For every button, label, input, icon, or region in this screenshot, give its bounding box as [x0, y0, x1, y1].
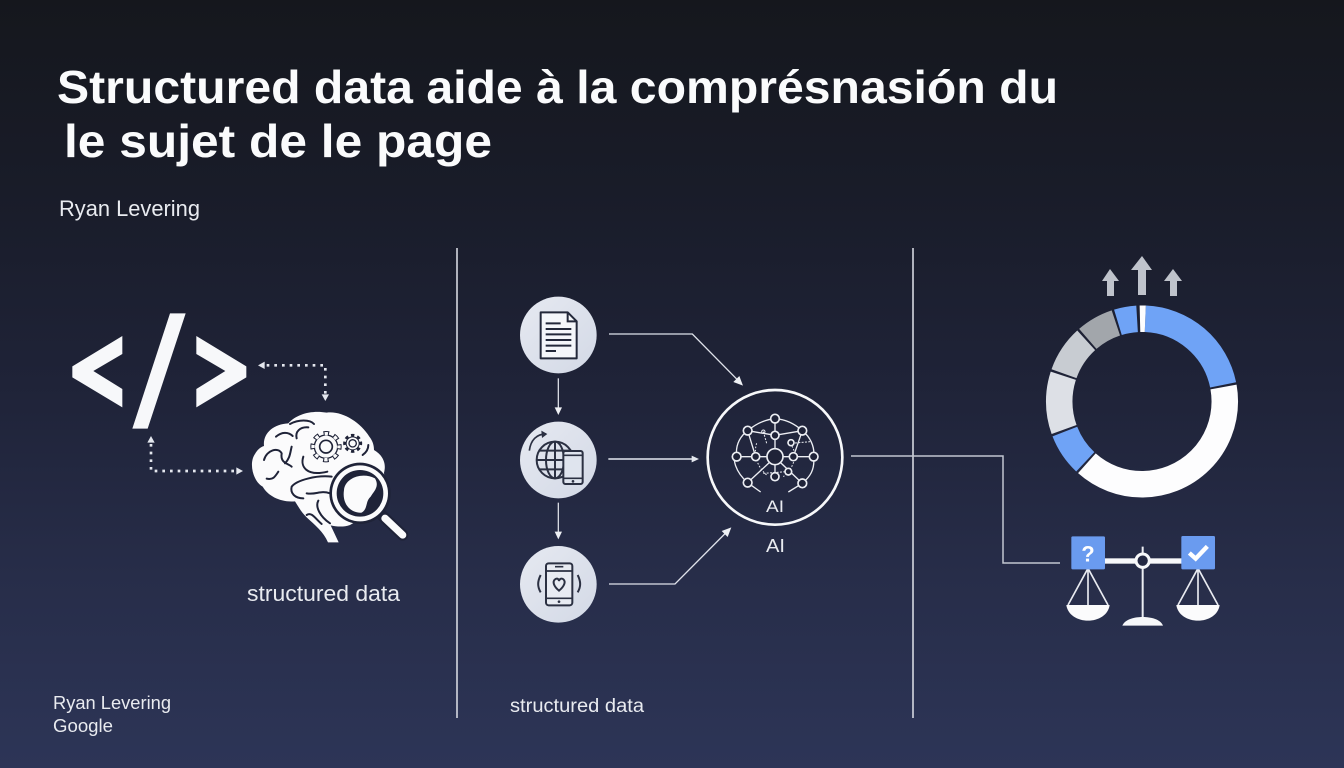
icon: right pan — [1176, 568, 1220, 621]
icon: question box: ? — [1081, 542, 1095, 567]
divider right — [912, 248, 914, 718]
label: structured data left: structured data — [247, 581, 401, 606]
icon: document — [520, 297, 597, 373]
divider left — [456, 248, 458, 718]
title: le sujet de le page — [64, 115, 492, 167]
label: structured data bottom: structured data — [510, 696, 644, 717]
arrow: phone to AI — [609, 527, 731, 584]
icon: small gear — [345, 435, 361, 451]
panel: flow to AI — [520, 297, 842, 623]
icon: AI neural network — [732, 414, 818, 492]
icon: scale stand — [1103, 547, 1183, 626]
footer: author and company — [53, 693, 171, 736]
arrow: doc to globe — [555, 378, 562, 415]
icon: AI circle — [708, 390, 842, 525]
label: AI below circle: AI — [766, 536, 785, 556]
arrow: doc to AI — [609, 334, 743, 386]
title: Structured data aide à la comprésnasión du — [57, 61, 1058, 113]
footer: author and company: Google — [53, 716, 113, 736]
icon: globe and phone — [520, 422, 597, 498]
arrow: dotted brackets to brain — [258, 362, 329, 401]
panel: balance scale — [1066, 536, 1220, 626]
icon: code brackets — [72, 313, 246, 429]
icon: phone with heart — [520, 546, 597, 623]
arrow: globe to AI — [608, 456, 699, 462]
connector: AI to scales — [851, 456, 1060, 563]
donut chart — [1059, 319, 1225, 484]
subtitle: author: Ryan Levering — [59, 196, 200, 221]
panel: up arrows — [1102, 256, 1182, 296]
icon: large gear — [313, 433, 339, 460]
icon: check box — [1181, 536, 1215, 569]
arrow: globe to phone — [555, 503, 562, 539]
title — [57, 61, 1058, 167]
label: AI inside circle: AI — [766, 497, 784, 516]
icon: left pan — [1066, 568, 1110, 621]
icon: left up arrow — [1102, 269, 1119, 296]
panel: code and brain — [72, 313, 403, 542]
icon: magnifier — [329, 463, 403, 535]
icon: question box — [1071, 536, 1105, 569]
footer: author and company: Ryan Levering — [53, 693, 171, 713]
icon: right up arrow — [1164, 269, 1182, 296]
icon: brain with gears and magnifier — [252, 412, 403, 542]
arrow: dotted brain to brackets — [147, 436, 243, 475]
icon: centre up arrow — [1131, 256, 1152, 295]
